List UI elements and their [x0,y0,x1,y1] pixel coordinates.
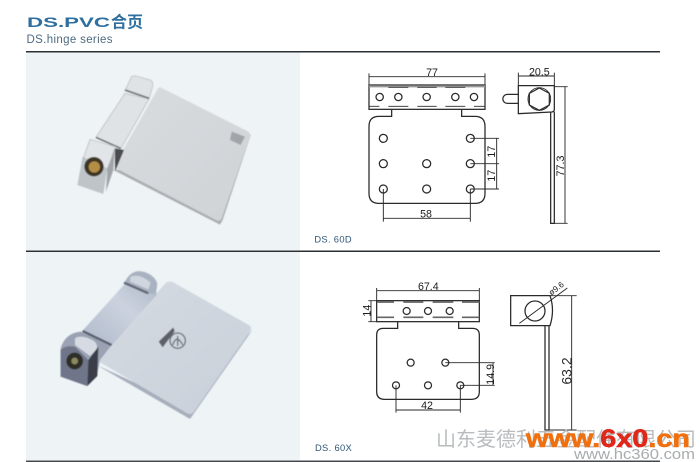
model label DS.60D: DS. 60D [314,235,352,245]
side view with diameter 9.6 and 63.2 dimensions: ø9.6 [547,279,566,297]
side view with 20.5 and 77.3 dimensions [503,66,568,223]
drawing: DS.60X technical drawing [315,279,577,453]
front view with 77 dimension: 17 [486,146,498,158]
front view with 67.4, 14, 14.9 and 42 dimensions: 14.9 [485,364,497,385]
front view with 67.4, 14, 14.9 and 42 dimensions: 42 [421,400,433,412]
drawing: DS.60D technical drawing [314,66,568,245]
front view with 67.4, 14, 14.9 and 42 dimensions: 14 [362,305,374,317]
heading: DS.PVC hinge title: 合页 [111,12,143,32]
front view with 77 dimension [369,67,499,222]
heading: DS.PVC hinge title: DS.hinge series [26,34,113,46]
front view with 77 dimension: 17 [486,170,498,182]
front view with 77 dimension: 77 [426,67,438,79]
divider line bottom [26,460,660,462]
model label DS.60X: DS. 60X [315,443,353,453]
heading: DS.PVC hinge title: DS.PVC [27,14,110,30]
divider line top [26,51,660,52]
panel: DS.60X photo background [26,252,300,460]
side view with 20.5 and 77.3 dimensions: 77.3 [555,156,567,176]
side view with 20.5 and 77.3 dimensions: 20.5 [529,66,550,78]
heading: DS.PVC hinge title [26,12,143,46]
front view with 67.4, 14, 14.9 and 42 dimensions [362,281,497,413]
watermark: www.6x0.cn: www. 6x0 .cn [525,425,690,453]
panel: DS.60D photo background [26,52,300,250]
photo: DS.60X hinge [61,271,252,419]
side view with diameter 9.6 and 63.2 dimensions: 63.2 [559,357,575,385]
watermark: company name: 山东麦德利五金配件有限公司 [436,428,696,451]
front view with 77 dimension: 58 [420,209,432,221]
side view with diameter 9.6 and 63.2 dimensions [511,279,577,430]
divider line middle [26,250,660,252]
photo: DS.60D hinge [77,76,251,225]
front view with 67.4, 14, 14.9 and 42 dimensions: 67.4 [418,281,439,293]
